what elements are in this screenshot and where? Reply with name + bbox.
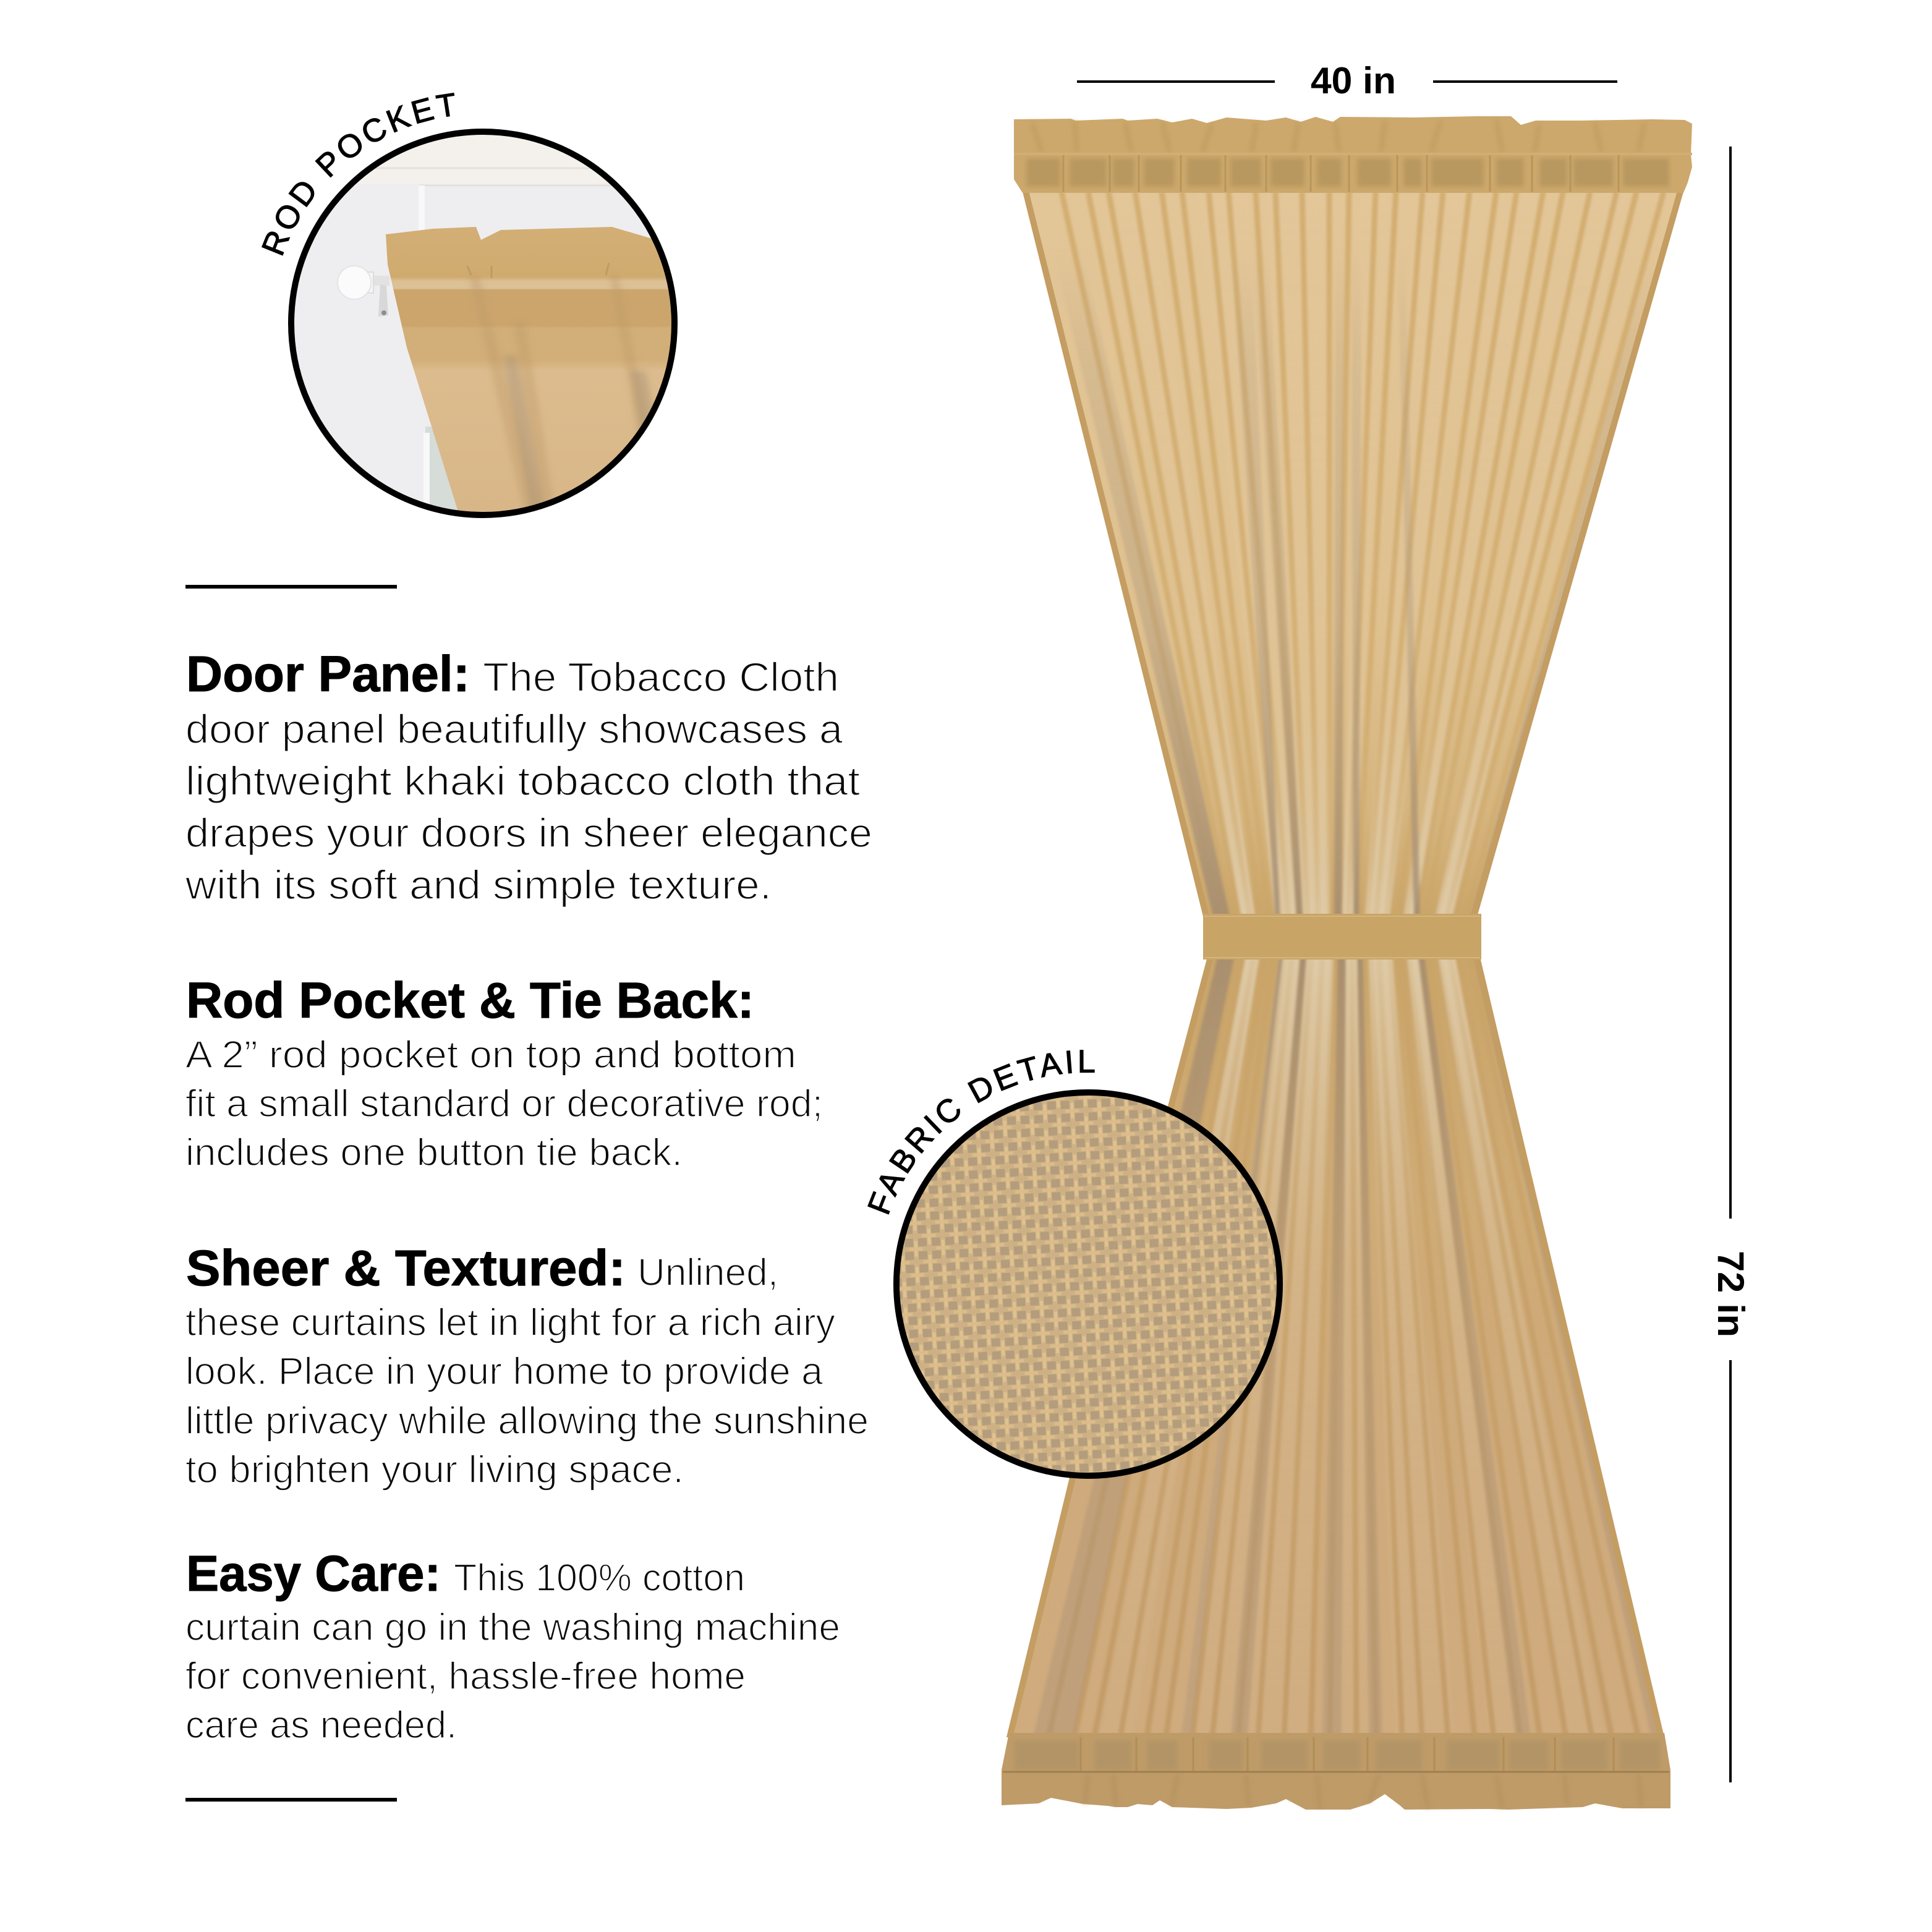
text block: sheer and textured: to brighten your living space. (185, 1449, 684, 1491)
text block: sheer and textured: little privacy while allowing the sunshine (185, 1400, 869, 1442)
text block: door panel: The Tobacco Cloth (483, 654, 839, 700)
text block: sheer and textured: Unlined, (637, 1251, 778, 1294)
text block: door panel: Door Panel: (186, 646, 470, 702)
text block: easy care: care as needed. (185, 1704, 457, 1747)
divider: top (185, 585, 397, 589)
text block: rod pocket and tie back: Rod Pocket & Tie Back: (186, 972, 754, 1029)
tie back band (1203, 914, 1481, 960)
text block: rod pocket and tie back (185, 972, 823, 1174)
callout: fabric detail circle (867, 1050, 1283, 1479)
text block: sheer and textured: these curtains let in light for a rich airy (185, 1301, 835, 1344)
curtain body upper and lower drape (1002, 185, 1694, 1743)
text block: door panel: drapes your doors in sheer elegance (185, 810, 872, 856)
text block: door panel: door panel beautifully showcases a (185, 706, 843, 752)
text block: sheer and textured: Sheer & Textured: (186, 1240, 626, 1296)
curtain fabric (386, 227, 680, 519)
text block: rod pocket and tie back: fit a small standard or decorative rod; (185, 1083, 823, 1125)
divider: bottom (185, 1798, 397, 1802)
top rod pocket header (1014, 116, 1692, 193)
text block: easy care: This 100% cotton (454, 1557, 745, 1599)
text block: rod pocket and tie back: includes one button tie back. (185, 1131, 683, 1174)
height dimension: 72 in: 72 in (1710, 1251, 1751, 1337)
bottom rod pocket and ruffle (1002, 1733, 1670, 1810)
text block: easy care (185, 1546, 840, 1747)
text block: door panel: lightweight khaki tobacco cloth that (185, 758, 860, 804)
text block: sheer and textured: look. Place in your home to provide a (185, 1350, 823, 1393)
text block: easy care: Easy Care: (186, 1546, 441, 1602)
text block: sheer and textured (185, 1240, 869, 1491)
photo: tobacco cloth door panel curtain (1002, 116, 1694, 1810)
icon: rod finial and bracket (338, 266, 389, 317)
callout: rod pocket photo circle (262, 93, 678, 518)
white backing and woven texture (890, 1088, 1286, 1484)
text block: door panel: with its soft and simple texture. (185, 862, 772, 908)
text block: easy care: for convenient, hassle-free home (185, 1655, 746, 1698)
curved label: ROD POCKET: ROD POCKET (262, 93, 455, 256)
text block: rod pocket and tie back: A 2” rod pocket on top and bottom (185, 1034, 796, 1076)
text block: door panel (185, 646, 872, 908)
text block: easy care: curtain can go in the washing machine (185, 1606, 840, 1649)
curved label: FABRIC DETAIL: FABRIC DETAIL (867, 1050, 1095, 1215)
photo: rod and curtain top (284, 124, 680, 519)
width dimension: 40 in: 40 in (1311, 60, 1396, 101)
